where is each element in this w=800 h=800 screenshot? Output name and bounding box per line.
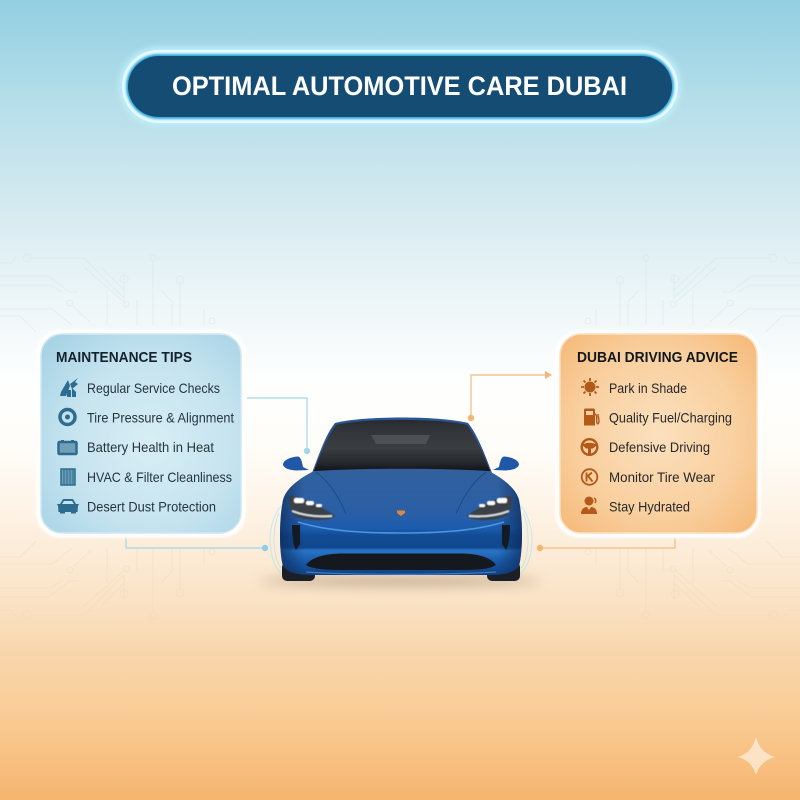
item: hvac and filter cleanliness: HVAC & Filter Cleanliness: [87, 469, 232, 485]
panel: maintenance tips: [36, 330, 246, 538]
item: quality fuel and charging: Quality Fuel/Charging: [609, 410, 732, 426]
item: regular service checks: [60, 378, 220, 397]
sparkle mark: [738, 737, 775, 775]
item: park in shade: Park in Shade: [609, 380, 687, 396]
body edge shading: [280, 469, 522, 575]
panel: dubai driving advice: [555, 330, 761, 538]
heading: dubai driving advice: DUBAI DRIVING ADVICE: [577, 349, 738, 366]
item: defensive driving: Defensive Driving: [609, 439, 710, 455]
connector: maintenance to car lower: [126, 538, 268, 551]
title text: OPTIMAL AUTOMOTIVE CARE DUBAI: [172, 71, 627, 101]
arrow: car to driving advice: [468, 371, 552, 421]
body: [280, 469, 522, 575]
lower grille surround highlight: [306, 572, 496, 574]
circuit pattern: upper left: [0, 254, 215, 332]
wheels: [282, 562, 520, 581]
car: [260, 418, 540, 586]
item: tire pressure and alignment: Tire Pressure & Alignment: [87, 410, 234, 426]
item: battery health in heat: Battery Health in Heat: [87, 439, 214, 455]
heading: maintenance tips: MAINTENANCE TIPS: [56, 349, 192, 366]
badge: [397, 510, 405, 516]
item: desert dust protection: Desert Dust Protection: [87, 498, 216, 514]
lower grille: [306, 554, 496, 570]
connector: car lower to driving advice: [537, 538, 675, 551]
item: regular service checks: Regular Service Checks: [87, 380, 220, 396]
item: park in shade: [581, 378, 687, 396]
item: monitor tire wear: Monitor Tire Wear: [609, 469, 715, 485]
circuit pattern: lower right: [585, 541, 800, 619]
side vents: [292, 525, 510, 550]
circuit pattern: lower left: [0, 541, 215, 619]
roof and windshield: [312, 418, 492, 473]
item: stay hydrated: Stay Hydrated: [609, 498, 690, 514]
circuit pattern: upper right: [585, 254, 800, 332]
right headlight: [467, 496, 512, 520]
title banner: [119, 47, 681, 126]
connector: maintenance to car upper: [247, 398, 310, 454]
tech glow arcs: [270, 505, 532, 574]
bumper crease highlight: [298, 522, 504, 533]
mirrors: [283, 456, 519, 470]
left headlight: [289, 496, 335, 520]
hood lines: [316, 472, 486, 514]
car ground shadow: [260, 576, 540, 586]
item: stay hydrated: [581, 496, 690, 514]
